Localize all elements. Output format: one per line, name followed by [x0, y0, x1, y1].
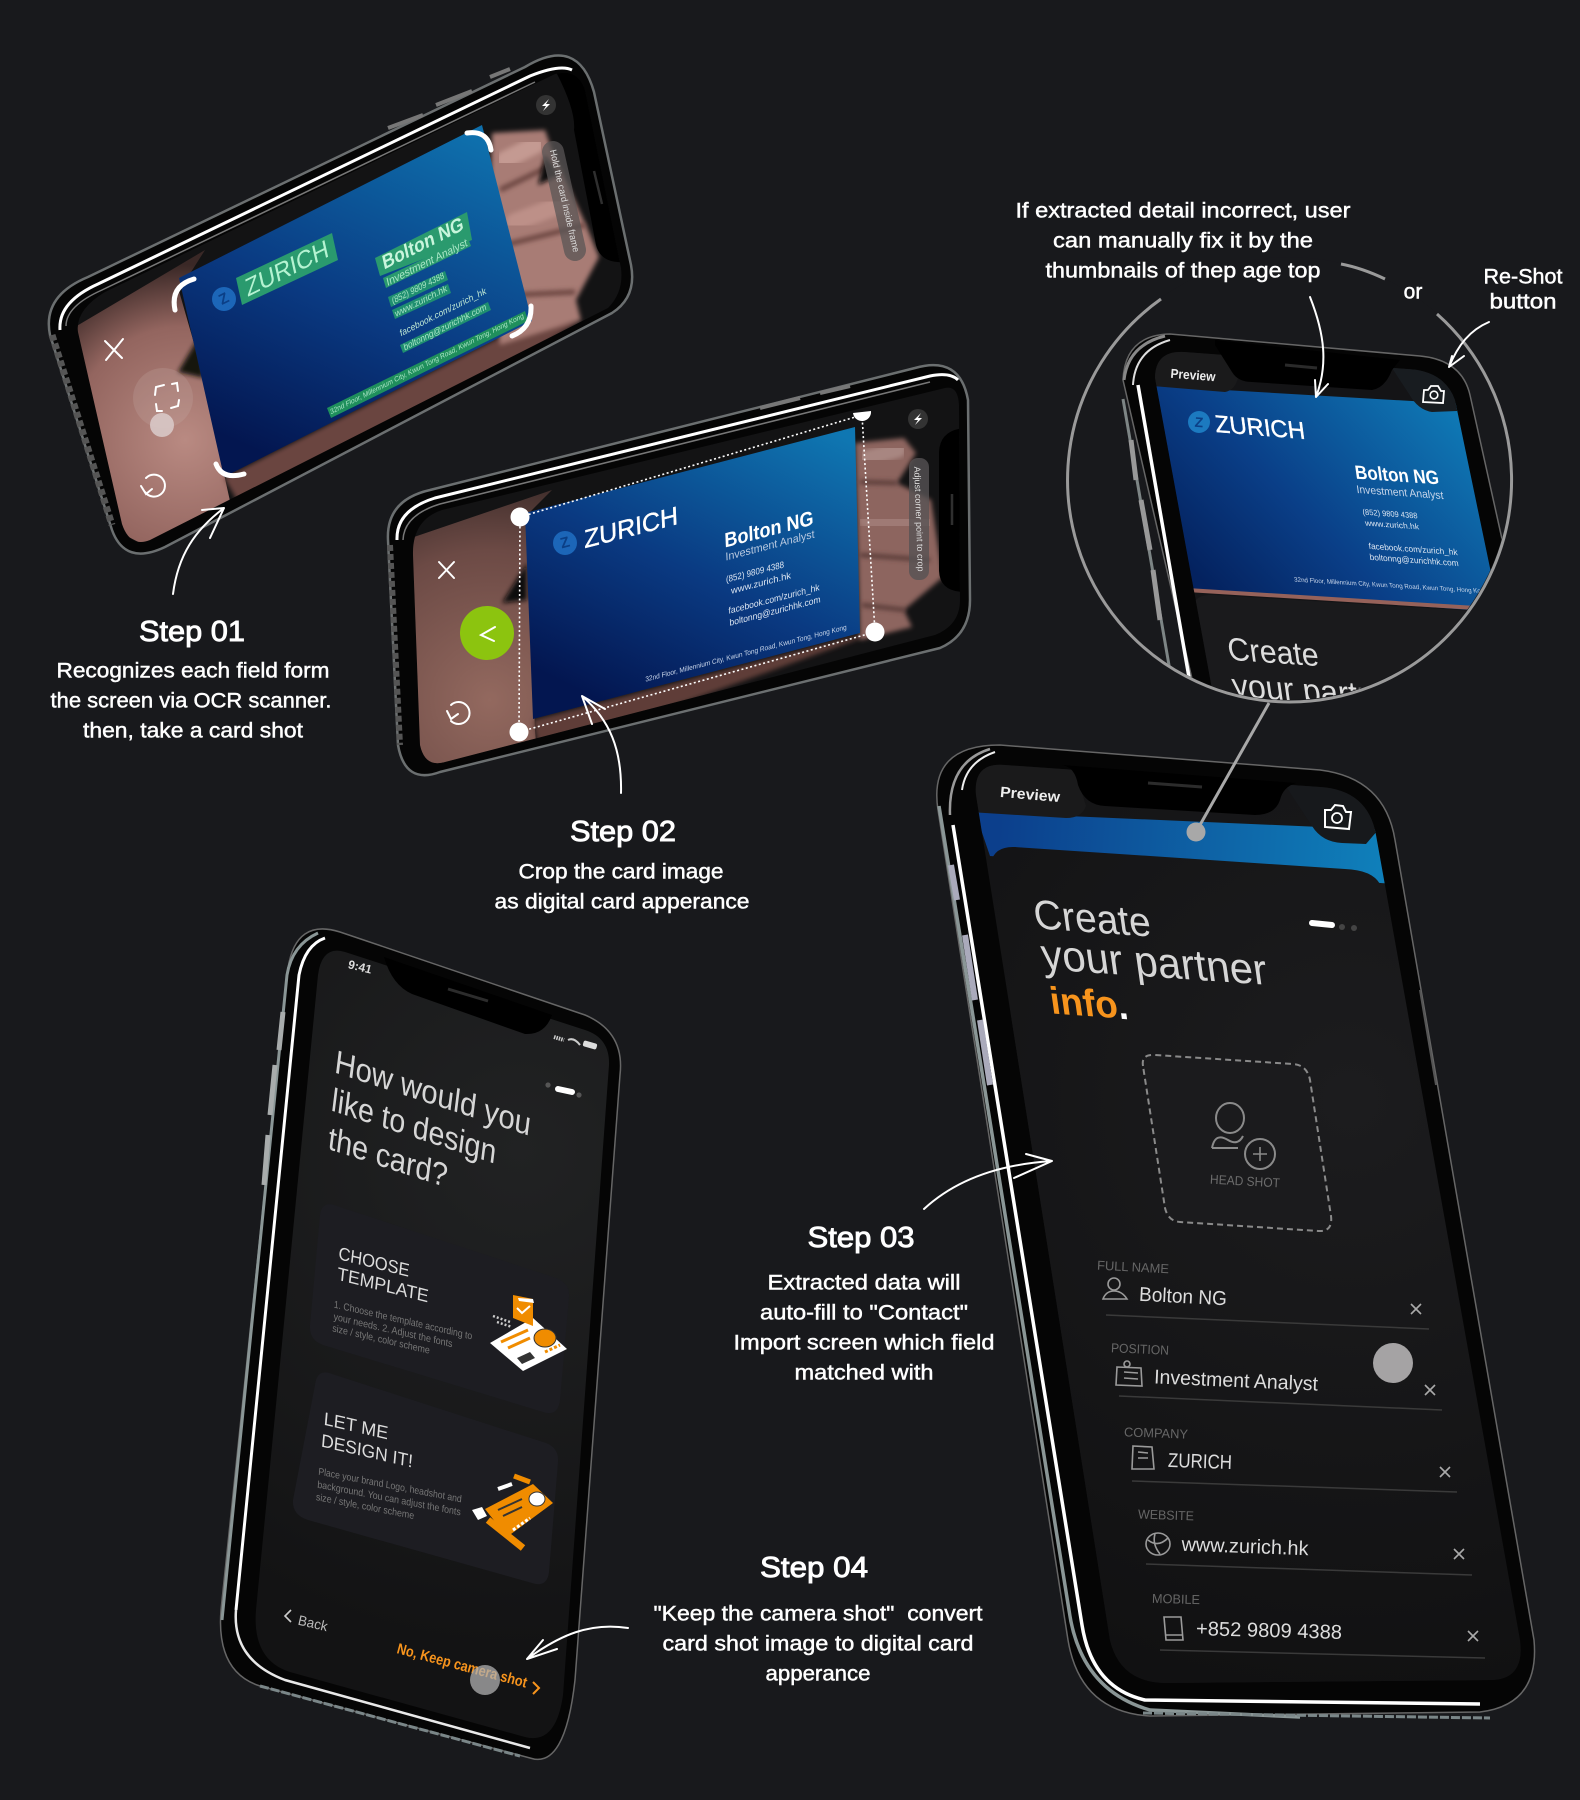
magnified lens: card preview: ZURICH	[1213, 411, 1307, 445]
scanned business card: ZURICH	[243, 235, 331, 303]
cropped business card: 32nd Floor, Millennium City, Kwun Tong Road, Kwun Tong, Hong Kong	[645, 624, 847, 684]
field: website	[1138, 1507, 1472, 1575]
field: company	[1124, 1424, 1457, 1492]
field: company: COMPANY	[1124, 1424, 1189, 1442]
arrow: step 03	[924, 1154, 1052, 1209]
status icons	[554, 1037, 598, 1050]
phone: step 04 choose design: 9:41	[347, 957, 374, 977]
arrow: step 01	[173, 508, 224, 594]
text: step 02	[494, 816, 750, 914]
option card: let me design it: background. You can adjust the fonts	[317, 1480, 461, 1518]
option card: choose template	[310, 1204, 569, 1413]
text: re-shot button: button	[1490, 290, 1556, 314]
text: or: or	[1404, 280, 1422, 304]
icon: template card	[490, 1295, 567, 1371]
icon: close	[439, 562, 454, 578]
tip pill: Hold the card inside frame	[547, 149, 581, 253]
magnified lens: card preview: Create	[1225, 631, 1321, 673]
magnified lens: card preview: facebook.com/zurich_hk	[1368, 541, 1459, 557]
option card: let me design it: size / style, color scheme	[315, 1492, 415, 1522]
callout: manual fix: If extracted detail incorrect, user	[1016, 200, 1350, 222]
text: step 03: Step 03	[808, 1222, 914, 1254]
scanned business card: boltonng@zurichhk.com	[403, 301, 487, 353]
text: step 03	[734, 1222, 994, 1384]
page dots	[1312, 923, 1357, 931]
heading	[1030, 890, 1270, 1028]
text: step 03: matched with	[794, 1362, 934, 1384]
frame brackets	[174, 133, 531, 476]
arrow: step 02	[582, 696, 621, 793]
back link: Back	[297, 1612, 330, 1634]
magnified lens: card preview: Bolton NG	[1354, 463, 1440, 489]
icon: flash	[908, 409, 928, 429]
option card: choose template: size / style, color scheme	[332, 1323, 431, 1357]
cropped business card: facebook.com/zurich_hk	[728, 582, 820, 616]
cropped business card: Bolton NG	[724, 507, 814, 553]
magnified lens: card preview: Z	[1194, 414, 1204, 430]
field: mobile: MOBILE	[1152, 1591, 1201, 1607]
notch	[557, 73, 620, 262]
magnified lens: card preview: (852) 9809 4388	[1362, 508, 1419, 520]
text: step 01: the screen via OCR scanner.	[50, 690, 332, 712]
field: position: POSITION	[1111, 1340, 1169, 1358]
hand photo	[70, 130, 599, 548]
notch	[1221, 354, 1394, 390]
text: step 04: "Keep the camera shot" convert	[654, 1602, 983, 1626]
lens ring	[1068, 299, 1512, 702]
crop handles	[510, 411, 884, 742]
icon: shutter button	[133, 368, 193, 437]
scanned business card: Z	[216, 289, 232, 309]
field: full name	[1097, 1258, 1429, 1329]
magnified lens: card preview: Preview	[1170, 366, 1217, 384]
text: step 02: Step 02	[570, 816, 676, 848]
heading: the card?	[326, 1120, 450, 1194]
field: position	[1111, 1340, 1442, 1410]
text: step 03: Import screen which field	[734, 1332, 994, 1354]
text: step 04: card shot image to digital card	[662, 1632, 974, 1656]
phone: step 04 choose design	[220, 929, 621, 1759]
notch	[384, 957, 552, 1034]
icon: rotate	[141, 475, 165, 497]
cropped business card: www.zurich.hk	[730, 570, 792, 596]
text: step 01	[50, 616, 332, 742]
icon: design card	[472, 1476, 553, 1548]
keep camera shot link: No, Keep camera shot	[395, 1640, 529, 1692]
head shot upload box: HEAD SHOT	[1210, 1172, 1280, 1190]
magnified lens: card preview	[1066, 262, 1514, 704]
phone: step 03 create partner info	[937, 745, 1535, 1718]
heading: your partner	[1038, 931, 1270, 995]
notch	[939, 429, 960, 592]
text: re-shot button: Re-Shot	[1484, 266, 1563, 288]
magnified lens: card preview: boltonng@zurichhk.com	[1369, 552, 1459, 568]
text: step 01: then, take a card shot	[83, 720, 303, 742]
cropped business card	[525, 427, 860, 719]
green confirm button	[452, 598, 522, 668]
phone: step 02 crop	[388, 365, 970, 790]
text: step 01: Recognizes each field form	[56, 660, 330, 682]
scanned business card: Investment Analyst	[385, 237, 469, 289]
phone: step 01 camera scan	[49, 55, 640, 554]
icon: camera	[1325, 805, 1351, 829]
cropped business card: boltonng@zurichhk.com	[729, 594, 821, 628]
icon: camera	[1423, 386, 1444, 403]
field: company: ZURICH	[1168, 1450, 1232, 1474]
field: website: WEBSITE	[1138, 1507, 1195, 1523]
icon: rotate	[447, 702, 470, 724]
option card: choose template: TEMPLATE	[336, 1264, 430, 1306]
field: mobile: +852 9809 4388	[1196, 1618, 1342, 1644]
arrow: manual fix	[1310, 297, 1328, 397]
text: step 03: Extracted data will	[768, 1272, 960, 1294]
magnified lens: card preview: 32nd Floor, Millennium City, Kwun Tong Road, Kwun Tong, Hong Kong	[1294, 577, 1489, 595]
heading: info.	[1047, 979, 1131, 1028]
magnified lens: card preview: your partner	[1229, 667, 1406, 717]
notch	[1062, 765, 1296, 815]
magnified lens: card preview: www.zurich.hk	[1363, 519, 1421, 531]
heading: like to design	[330, 1081, 498, 1171]
option card: choose template: CHOOSE	[338, 1243, 410, 1281]
arrow: re-shot	[1449, 322, 1489, 367]
field: mobile	[1152, 1591, 1485, 1658]
cropped business card: (852) 9809 4388	[726, 559, 784, 585]
callout: manual fix: can manually fix it by the	[1053, 230, 1313, 252]
tip pill: Adjust corner point to crop	[912, 466, 926, 572]
icon: close	[105, 339, 123, 360]
heading: How would you	[333, 1043, 533, 1143]
text: re-shot button	[1484, 266, 1563, 314]
text: step 02: as digital card apperance	[494, 890, 750, 914]
option card: choose template: your needs. 2. Adjust the fonts	[333, 1312, 453, 1350]
touch indicator	[1373, 1343, 1413, 1383]
cropped business card: Investment Analyst	[725, 528, 815, 564]
scanned business card: facebook.com/zurich_hk	[399, 285, 487, 338]
option card: let me design it: Place your brand Logo, headshot and	[318, 1467, 462, 1505]
head shot upload box	[1143, 1055, 1331, 1231]
back link	[285, 1610, 330, 1634]
field: position: Investment Analyst	[1154, 1366, 1319, 1396]
page dots	[545, 1082, 582, 1098]
arrow: step 04	[527, 1627, 628, 1659]
field: full name: FULL NAME	[1097, 1258, 1170, 1276]
field: website: www.zurich.hk	[1180, 1534, 1310, 1560]
heading	[326, 1043, 533, 1194]
cropped business card: Z	[558, 534, 572, 552]
cropped business card: ZURICH	[583, 502, 679, 554]
tip pill	[909, 458, 929, 580]
text: step 03: auto-fill to "Contact"	[760, 1302, 968, 1324]
scanned business card: 32nd Floor, Millennium City, Kwun Tong Road, Kwun Tong, Hong Kong	[330, 312, 525, 416]
blue card strip	[975, 812, 1395, 884]
scanned business card: (852) 9809 4388	[391, 270, 445, 306]
option card: let me design it: DESIGN IT!	[320, 1430, 414, 1472]
text: step 04: Step 04	[760, 1552, 868, 1584]
text: step 04: apperance	[766, 1662, 870, 1686]
icon: flash	[536, 95, 556, 115]
field: full name: Bolton NG	[1138, 1284, 1228, 1310]
text: step 02: Crop the card image	[518, 860, 724, 884]
scanned business card	[179, 125, 532, 477]
hand photo	[405, 438, 943, 790]
heading: Create	[1030, 890, 1154, 946]
option card: let me design it	[293, 1372, 558, 1584]
scanned business card: Bolton NG	[380, 213, 466, 275]
callout: manual fix: thumbnails of thep age top	[1046, 260, 1320, 282]
text: step 04	[654, 1552, 983, 1686]
option card: choose template: 1. Choose the template according to	[333, 1300, 473, 1343]
magnified lens: card preview: Investment Analyst	[1356, 484, 1444, 502]
option card: let me design it: LET ME	[323, 1409, 389, 1443]
phone: step 03 create partner info: Preview	[999, 784, 1061, 806]
callout: manual fix	[1016, 200, 1350, 282]
text: step 01: Step 01	[139, 616, 245, 648]
connector from lens to tap dot	[1186, 703, 1269, 842]
scanned business card: www.zurich.hk	[393, 283, 448, 319]
